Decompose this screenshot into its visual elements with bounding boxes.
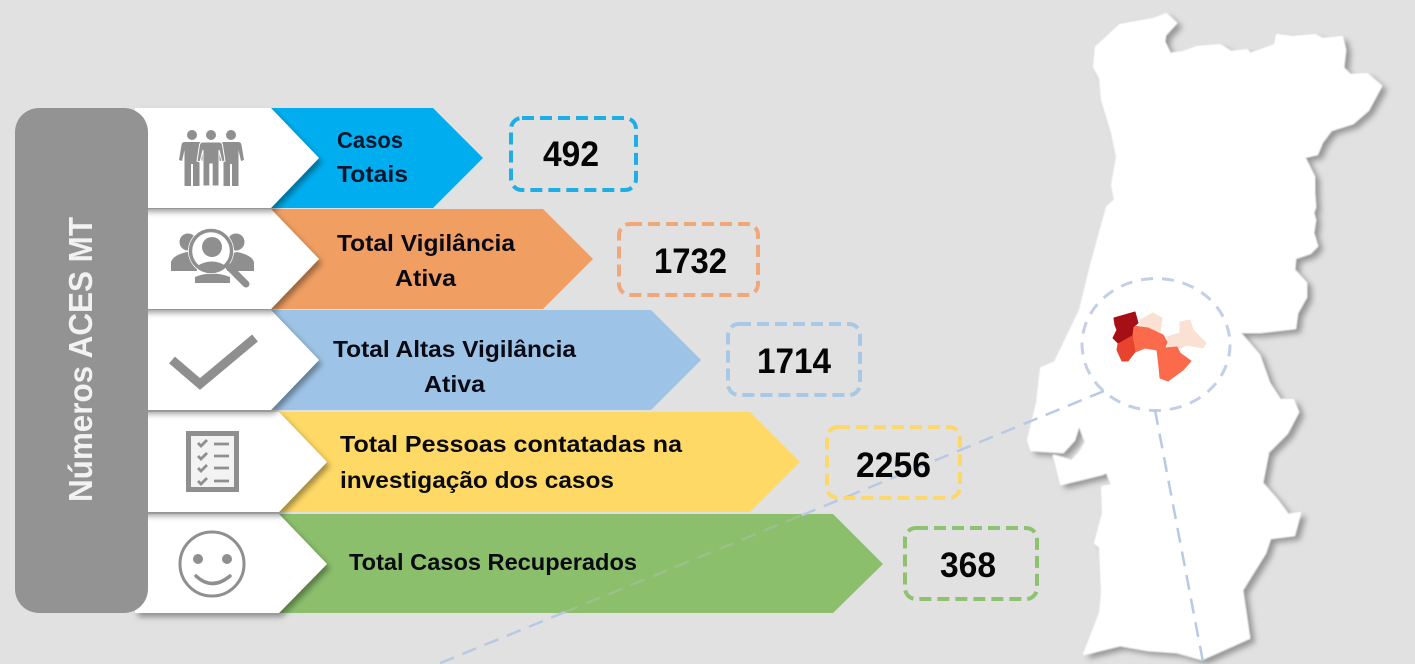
value box: vigilancia ativa: 1732 bbox=[654, 242, 727, 281]
row 1: casos totais bbox=[135, 108, 483, 208]
highlighted region circle bbox=[1082, 278, 1230, 410]
row 4: pessoas contatadas: investigação dos casos bbox=[340, 467, 614, 493]
label: Total Altas Vigilância bbox=[333, 336, 576, 362]
region: red bbox=[1117, 335, 1135, 361]
label: Casos bbox=[337, 127, 403, 153]
arrow: blue bbox=[262, 108, 483, 208]
side panel bbox=[15, 108, 148, 613]
row 2: vigilancia ativa: Ativa bbox=[395, 265, 456, 291]
label: Total Vigilância bbox=[337, 230, 515, 256]
value box: altas vigilancia bbox=[728, 324, 860, 395]
label: Total Casos Recuperados bbox=[349, 549, 637, 575]
row 1: casos totais: Totais bbox=[337, 161, 408, 187]
white tab bbox=[135, 310, 319, 410]
row 3: altas vigilancia: Ativa bbox=[424, 371, 485, 397]
region: light north bbox=[1140, 313, 1162, 332]
value box: casos totais: 492 bbox=[543, 135, 599, 174]
white tab bbox=[135, 209, 319, 309]
value box: altas vigilancia: 1714 bbox=[757, 342, 831, 381]
white tab bbox=[135, 514, 327, 613]
arrow: light blue bbox=[262, 310, 701, 410]
icon: people under magnifier bbox=[171, 228, 254, 284]
map outline bbox=[1028, 14, 1381, 659]
dashed leader lines bbox=[438, 391, 1203, 664]
value box: casos recuperados: 368 bbox=[940, 546, 996, 585]
panel title: Números ACES MT bbox=[62, 217, 99, 502]
panel background bbox=[15, 108, 148, 613]
arrow: yellow bbox=[270, 412, 800, 512]
row 5: casos recuperados bbox=[135, 514, 883, 613]
icon: check mark bbox=[172, 338, 255, 384]
icon: checklist bbox=[188, 434, 236, 490]
value box: pessoas contatadas: 2256 bbox=[856, 446, 931, 485]
value box: casos recuperados bbox=[905, 528, 1037, 599]
region: dark red bbox=[1113, 312, 1138, 343]
region: salmon bbox=[1132, 326, 1191, 381]
white tab bbox=[135, 108, 319, 208]
label: Total Pessoas contatadas na bbox=[340, 431, 682, 457]
row 3: altas vigilancia bbox=[135, 310, 701, 410]
value box: casos totais bbox=[511, 118, 636, 190]
icon: smiley bbox=[180, 532, 244, 596]
arrow: orange bbox=[262, 209, 593, 309]
region: light east bbox=[1167, 320, 1206, 349]
arrow: green bbox=[270, 514, 883, 613]
map of Portugal bbox=[1028, 14, 1381, 659]
value box: vigilancia ativa bbox=[619, 224, 758, 295]
value box: pessoas contatadas bbox=[827, 427, 960, 498]
icon: three people bbox=[179, 130, 244, 186]
white tab bbox=[135, 412, 327, 512]
row 2: vigilancia ativa bbox=[135, 209, 593, 309]
row 4: pessoas contatadas bbox=[135, 412, 800, 512]
